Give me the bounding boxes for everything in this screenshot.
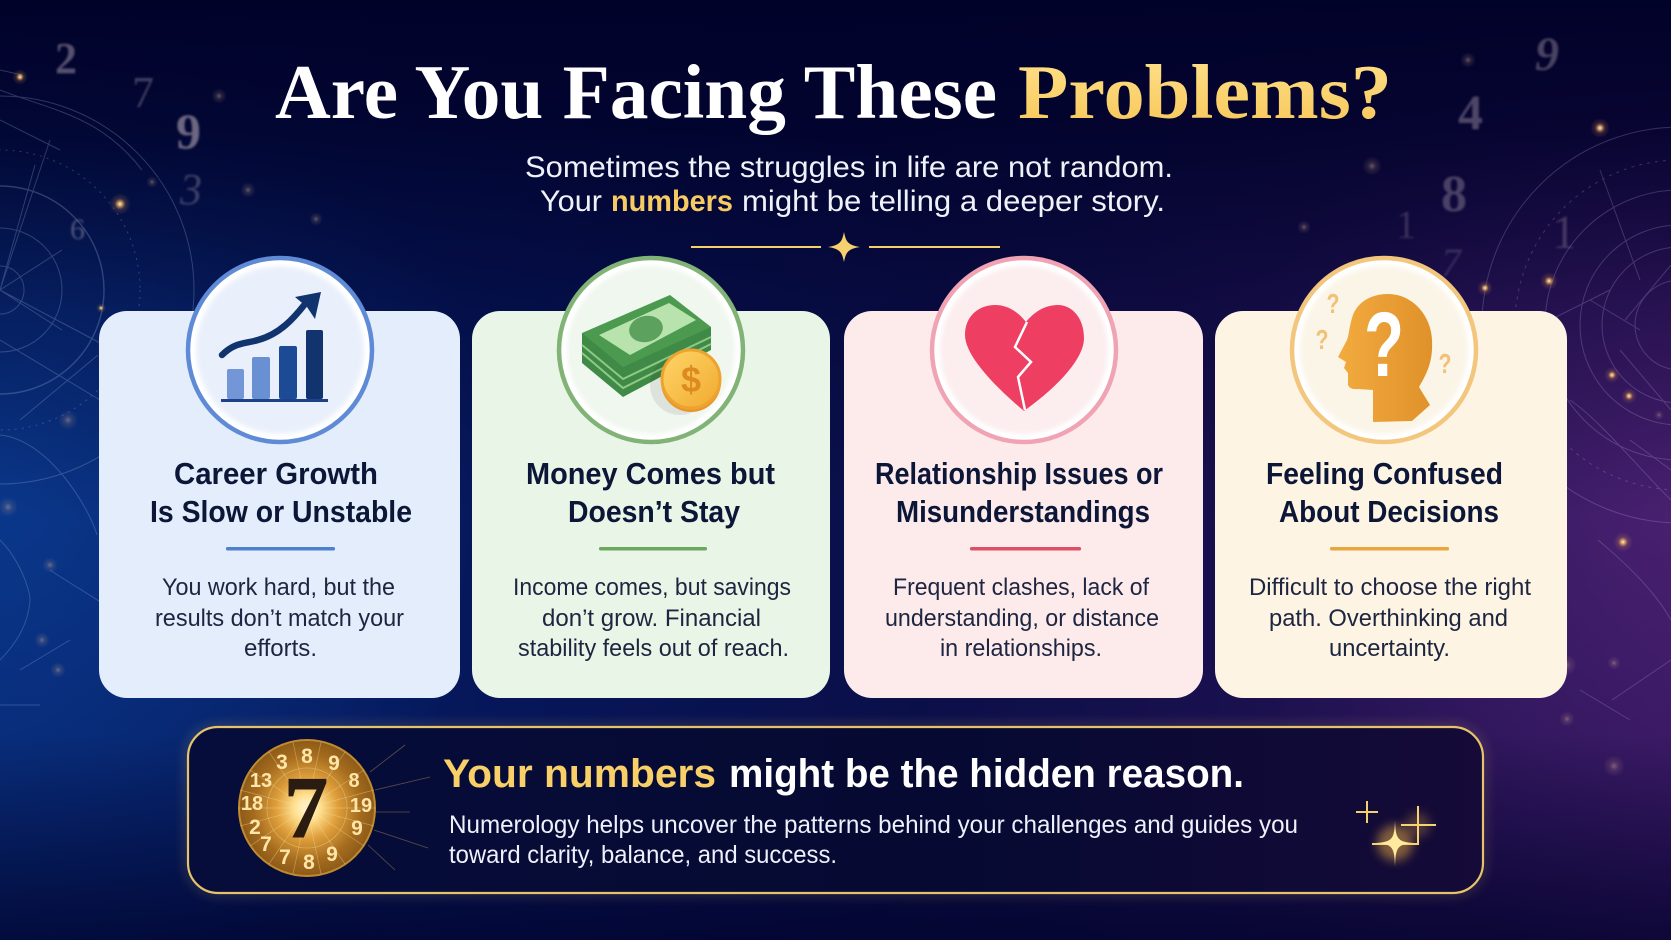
faint background numbers: 1 bbox=[1552, 206, 1576, 259]
icon: growth chart bbox=[188, 258, 372, 442]
description: Difficult to choose the right bbox=[1249, 574, 1531, 601]
callout banner bbox=[188, 727, 1483, 893]
faint background numbers: 8 bbox=[1441, 166, 1467, 223]
faint background numbers bbox=[55, 28, 1576, 285]
icon: numerology medallion: 18 bbox=[241, 793, 263, 815]
right astrolabe pattern bbox=[1482, 127, 1671, 720]
heading: Money Comes but bbox=[526, 456, 775, 491]
panel: relationship bbox=[844, 258, 1203, 698]
heading: About Decisions bbox=[1279, 494, 1499, 529]
description: results don’t match your bbox=[155, 605, 404, 632]
icon: numerology medallion: 3 bbox=[276, 751, 288, 774]
icon: cash and coin bbox=[559, 258, 743, 442]
icon: sparkles bbox=[1356, 801, 1436, 867]
icon: numerology medallion: 9 bbox=[328, 752, 340, 775]
faint background numbers: 6 bbox=[70, 213, 85, 246]
icon: numerology medallion: 7 bbox=[279, 846, 291, 869]
banner heading: Your numbers bbox=[443, 752, 716, 796]
divider with star bbox=[691, 232, 1000, 262]
description: Frequent clashes, lack of bbox=[893, 574, 1149, 601]
left astrolabe pattern bbox=[0, 70, 194, 705]
faint background numbers: 7 bbox=[1441, 240, 1463, 285]
description: understanding, or distance bbox=[885, 605, 1159, 632]
panel: money bbox=[472, 258, 830, 698]
heading: Career Growth bbox=[174, 456, 378, 491]
icon: confused head: ? bbox=[1364, 294, 1404, 396]
panel: decisions bbox=[1215, 258, 1567, 698]
faint background numbers: 7 bbox=[132, 68, 154, 117]
title: Problems? bbox=[1018, 49, 1392, 135]
description: path. Overthinking and bbox=[1269, 605, 1508, 632]
faint background numbers: 3 bbox=[179, 165, 202, 214]
icon: numerology medallion: 8 bbox=[301, 745, 313, 768]
description bbox=[155, 574, 404, 662]
icon: numerology medallion: 9 bbox=[351, 817, 363, 840]
subtitle: Your bbox=[540, 185, 602, 218]
icon: confused head bbox=[1292, 258, 1476, 442]
icon: numerology medallion: 8 bbox=[303, 851, 315, 874]
icon: numerology medallion: 7 bbox=[260, 833, 272, 856]
icon: numerology medallion: 9 bbox=[326, 843, 338, 866]
description bbox=[1249, 574, 1531, 662]
faint background numbers: 9 bbox=[1535, 28, 1559, 81]
heading: Misunderstandings bbox=[896, 494, 1150, 529]
description: in relationships. bbox=[940, 635, 1102, 662]
icon: confused head: ? bbox=[1438, 348, 1452, 379]
heading bbox=[875, 456, 1163, 529]
icon: confused head: ? bbox=[1316, 324, 1328, 355]
heading bbox=[150, 456, 412, 529]
subtitle: numbers bbox=[611, 185, 733, 218]
description: Income comes, but savings bbox=[513, 574, 791, 601]
icon: cash and coin: $ bbox=[681, 359, 701, 400]
banner text: Numerology helps uncover the patterns behind your challenges and guides you bbox=[449, 811, 1298, 839]
description: efforts. bbox=[244, 635, 317, 662]
heading: Feeling Confused bbox=[1266, 456, 1503, 491]
icon: numerology medallion: 19 bbox=[350, 795, 372, 817]
heading: Relationship Issues or bbox=[875, 456, 1163, 491]
icon: numerology medallion: 2 bbox=[249, 816, 261, 839]
icon: numerology medallion bbox=[239, 740, 430, 876]
subtitle bbox=[525, 151, 1173, 218]
faint background numbers: 4 bbox=[1458, 84, 1483, 140]
heading: Is Slow or Unstable bbox=[150, 494, 412, 529]
description: You work hard, but the bbox=[162, 574, 395, 601]
banner text: toward clarity, balance, and success. bbox=[449, 841, 837, 869]
faint background numbers: 2 bbox=[55, 34, 77, 83]
heading bbox=[526, 456, 775, 529]
banner heading bbox=[443, 752, 1244, 796]
heading: Doesn’t Stay bbox=[568, 494, 741, 529]
icon: broken heart bbox=[932, 258, 1116, 442]
banner text bbox=[449, 811, 1298, 869]
subtitle: might be telling a deeper story. bbox=[742, 185, 1165, 218]
panel: career bbox=[99, 258, 460, 698]
subtitle: Sometimes the struggles in life are not random. bbox=[525, 151, 1173, 184]
icon: numerology medallion: 13 bbox=[250, 770, 272, 792]
icon: numerology medallion: 8 bbox=[348, 770, 360, 792]
description: uncertainty. bbox=[1329, 635, 1450, 662]
description: don’t grow. Financial bbox=[542, 605, 761, 632]
title: Are You Facing These bbox=[275, 49, 997, 135]
title bbox=[275, 49, 1392, 135]
icon: numerology medallion: 7 bbox=[284, 760, 328, 857]
background stars bbox=[0, 52, 1664, 777]
banner heading: might be the hidden reason. bbox=[729, 752, 1244, 796]
icon: confused head: ? bbox=[1326, 288, 1340, 319]
faint background numbers: 9 bbox=[176, 103, 201, 159]
description bbox=[885, 574, 1159, 662]
description bbox=[513, 574, 791, 662]
heading bbox=[1266, 456, 1503, 529]
faint background numbers: 1 bbox=[1396, 202, 1416, 247]
description: stability feels out of reach. bbox=[518, 635, 789, 662]
